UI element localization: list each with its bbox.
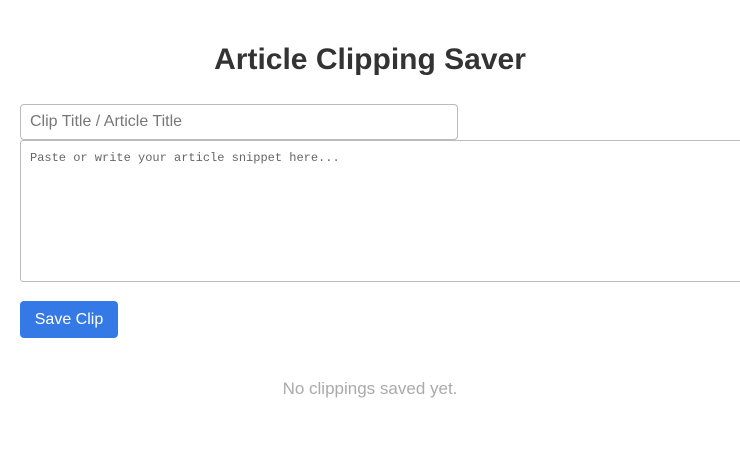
button: save clip xyxy=(20,301,118,338)
input: clip title: Clip Title / Article Title xyxy=(30,113,182,130)
textarea: snippet: Paste or write your article snippet here... xyxy=(30,151,340,165)
empty state message: No clippings saved yet. xyxy=(283,379,457,398)
textarea: snippet xyxy=(20,140,740,282)
input: clip title xyxy=(20,104,458,140)
title: Article Clipping Saver xyxy=(214,43,526,76)
button: save clip: Save Clip xyxy=(35,311,103,328)
